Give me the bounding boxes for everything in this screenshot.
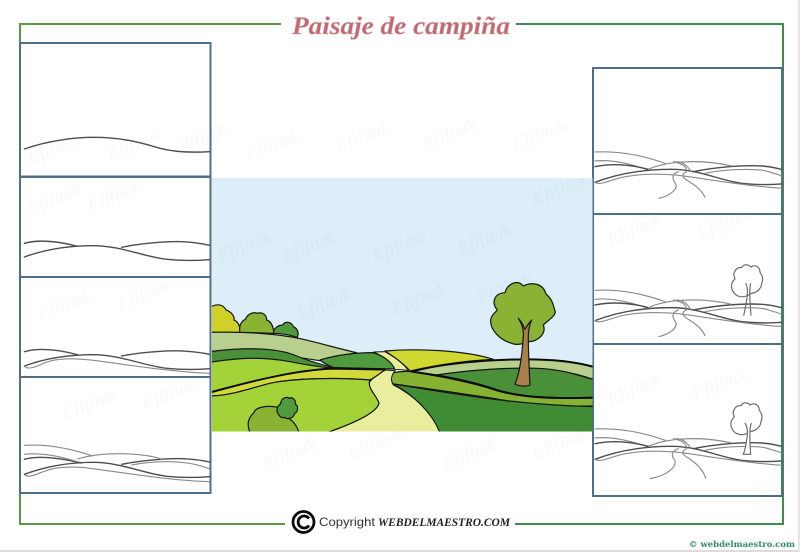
sky watermarks: Efifitak (388, 279, 449, 319)
watermarks: Efifitak (528, 424, 589, 464)
bushes on the left hill (210, 305, 298, 337)
icon: tree outline (732, 265, 763, 316)
right panels group (593, 68, 782, 496)
watermarks: Efifitak (33, 284, 94, 324)
watermarks: Efifitak (23, 179, 84, 219)
watermarks (23, 114, 754, 474)
yellow band and lime field (210, 368, 385, 435)
site credit: © webdelmaestro.com (689, 539, 796, 549)
panel: step 7 (593, 344, 782, 496)
icon: tree with trunk (731, 403, 762, 454)
far yellow hill (385, 350, 493, 371)
sky watermarks: Efifitak (473, 269, 534, 309)
watermarks: Efifitak (138, 374, 199, 414)
hill bands left (210, 332, 395, 392)
right hill bands (391, 359, 595, 435)
watermarks: Efifitak (603, 369, 664, 409)
thick ridge lines (412, 359, 595, 398)
watermarks: Efifitak (438, 434, 499, 474)
icon: foreground bush (248, 397, 300, 435)
watermarks: Efifitak (688, 364, 749, 404)
watermarks: Efifitak (331, 116, 392, 156)
sky watermarks: Efifitak (213, 226, 274, 266)
watermarks: Efifitak (693, 204, 754, 244)
panel: step 3 (20, 277, 210, 377)
watermarks: Efifitak (603, 209, 664, 249)
panel: step 1 (20, 43, 210, 176)
sky (212, 178, 592, 372)
sky watermarks: Efifitak (528, 169, 589, 209)
footer: copyright line: WEBDELMAESTRO.COM (378, 517, 511, 529)
watermarks: Efifitak (23, 129, 84, 169)
footer: copyright line (293, 512, 511, 532)
panel: step 6 (593, 214, 782, 344)
panel: step 5 (593, 68, 782, 214)
watermarks: Efifitak (241, 124, 302, 164)
watermarks: Efifitak (258, 434, 319, 474)
main illustration: coloured landscape (210, 169, 595, 435)
icon: tree (491, 283, 555, 386)
watermarks: Efifitak (343, 424, 404, 464)
watermarks: Efifitak (103, 124, 164, 164)
watermarks: Efifitak (83, 176, 144, 216)
sky watermarks: Efifitak (293, 284, 354, 324)
sky watermarks (213, 169, 589, 324)
sky watermarks: Efifitak (278, 226, 339, 266)
watermarks: Efifitak (113, 274, 174, 314)
panel: step 4 (20, 377, 210, 493)
icon: copyright symbol (293, 512, 314, 532)
far road section (373, 352, 408, 370)
road (332, 370, 440, 432)
left panels frame group (20, 43, 210, 493)
footer: copyright line: Copyright (319, 515, 376, 529)
watermarks: Efifitak (508, 114, 569, 154)
watermarks: Efifitak (58, 384, 119, 424)
sky watermarks: Efifitak (453, 219, 514, 259)
watermarks: Efifitak (418, 114, 479, 154)
panel: step 2 (20, 177, 210, 277)
watermarks: Efifitak (168, 119, 229, 159)
title: Paisaje de campiña (291, 13, 510, 40)
sky watermarks: Efifitak (368, 226, 429, 266)
